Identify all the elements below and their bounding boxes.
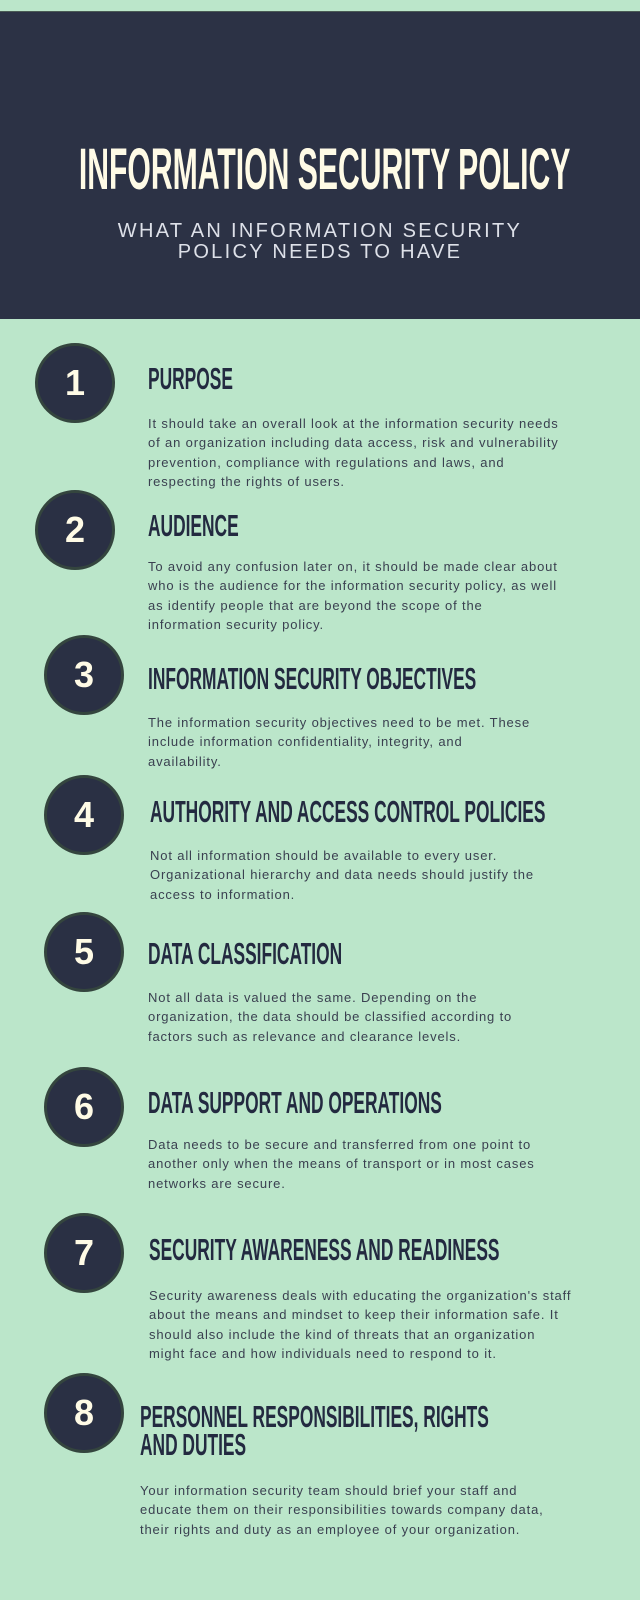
body 2: To avoid any confusion later on, it should be made clear about — [148, 559, 558, 574]
body 6: networks are secure. — [148, 1176, 286, 1191]
heading 6: DATA SUPPORT AND OPERATIONS — [148, 1085, 442, 1120]
icon: number 5 — [44, 912, 124, 992]
heading 3: INFORMATION SECURITY OBJECTIVES — [148, 661, 476, 696]
icon: number 4: 4 — [74, 794, 94, 835]
body 5: Not all data is valued the same. Depending on the — [148, 990, 477, 1005]
icon: number 4 — [44, 775, 124, 855]
heading 1: PURPOSE — [148, 361, 233, 396]
header panel — [0, 11, 640, 319]
body 8: educate them on their responsibilities towards company data, — [140, 1502, 544, 1517]
body 1: It should take an overall look at the information security needs — [148, 416, 559, 431]
heading 2: AUDIENCE — [148, 508, 239, 543]
body 6: another only when the means of transport or in most cases — [148, 1156, 535, 1171]
body 1: of an organization including data access, risk and vulnerability — [148, 435, 559, 450]
heading 8: AND DUTIES — [140, 1427, 246, 1462]
icon: number 5: 5 — [74, 931, 94, 972]
icon: number 7: 7 — [74, 1232, 94, 1273]
icon: number 2 — [35, 490, 115, 570]
body 3 — [148, 715, 530, 769]
subtitle — [118, 220, 522, 263]
heading 4: AUTHORITY AND ACCESS CONTROL POLICIES — [150, 794, 545, 829]
body 2 — [148, 559, 558, 632]
body 3: include information confidentiality, integrity, and — [148, 734, 463, 749]
body 7: about the means and mindset to keep their information safe. It — [149, 1307, 559, 1322]
heading 8: PERSONNEL RESPONSIBILITIES, RIGHTS — [140, 1399, 489, 1434]
body 5: organization, the data should be classified according to — [148, 1009, 512, 1024]
body 4: Not all information should be available to every user. — [150, 848, 497, 863]
subtitle: POLICY NEEDS TO HAVE — [178, 241, 462, 263]
body 7: should also include the kind of threats that an organization — [149, 1327, 535, 1342]
body 3: The information security objectives need to be met. These — [148, 715, 530, 730]
body 6 — [148, 1137, 535, 1191]
body 2: as identify people that are beyond the scope of the — [148, 598, 483, 613]
body 7: Security awareness deals with educating the organization's staff — [149, 1288, 571, 1303]
heading 5: DATA CLASSIFICATION — [148, 936, 342, 971]
body 8: Your information security team should brief your staff and — [140, 1483, 517, 1498]
body 7: might face and how individuals need to respond to it. — [149, 1346, 497, 1361]
icon: number 1: 1 — [65, 362, 85, 403]
body 1: respecting the rights of users. — [148, 474, 345, 489]
subtitle: WHAT AN INFORMATION SECURITY — [118, 220, 522, 242]
icon: number 2: 2 — [65, 509, 85, 550]
body 1: prevention, compliance with regulations and laws, and — [148, 455, 505, 470]
icon: number 3 — [44, 635, 124, 715]
icon: number 7 — [44, 1213, 124, 1293]
body 6: Data needs to be secure and transferred from one point to — [148, 1137, 531, 1152]
title: INFORMATION SECURITY POLICY — [79, 137, 571, 202]
body 3: availability. — [148, 754, 222, 769]
icon: number 6 — [44, 1067, 124, 1147]
body 4: Organizational hierarchy and data needs should justify the — [150, 867, 534, 882]
body 7 — [149, 1288, 571, 1361]
body 1 — [148, 416, 559, 489]
body 8 — [140, 1483, 544, 1537]
body 2: who is the audience for the information security policy, as well — [148, 578, 557, 593]
body 4 — [150, 848, 534, 902]
icon: number 8 — [44, 1373, 124, 1453]
body 5: factors such as relevance and clearance levels. — [148, 1029, 461, 1044]
heading 7: SECURITY AWARENESS AND READINESS — [149, 1232, 499, 1267]
icon: number 8: 8 — [74, 1392, 94, 1433]
icon: number 1 — [35, 343, 115, 423]
body 8: their rights and duty as an employee of your organization. — [140, 1522, 520, 1537]
heading 8 — [140, 1399, 489, 1462]
icon: number 3: 3 — [74, 654, 94, 695]
body 4: access to information. — [150, 887, 295, 902]
body 2: information security policy. — [148, 617, 324, 632]
body 5 — [148, 990, 512, 1044]
icon: number 6: 6 — [74, 1086, 94, 1127]
